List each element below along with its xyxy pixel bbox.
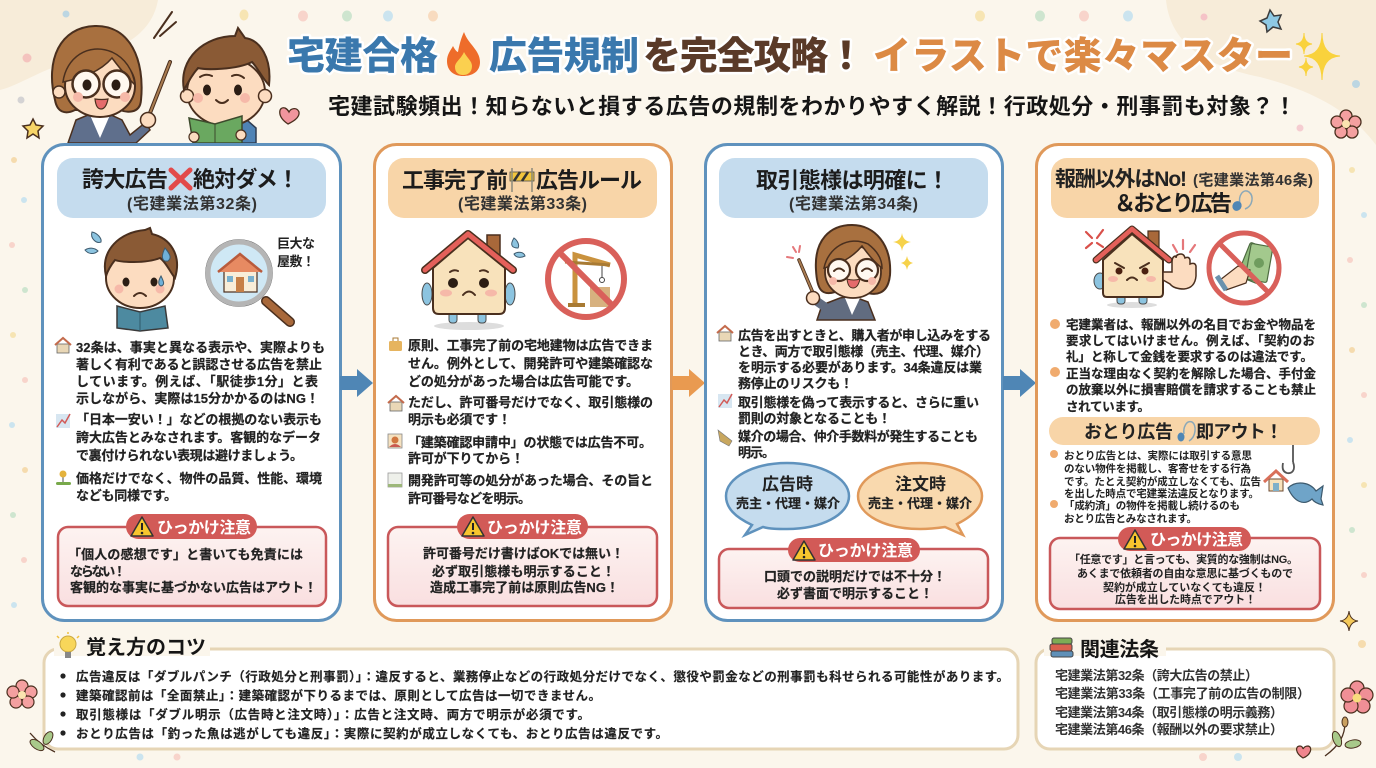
illustration: magnifier over house <box>206 240 290 322</box>
callout: trap warning: 「個人の感想です」と書いても免責には <box>68 547 303 562</box>
text block: forbidden demands: されています。 <box>1066 400 1150 414</box>
callout: trap warning: 口頭での説明だけでは不十分！ <box>764 569 946 584</box>
heading: before completion: (宅建業法第33条) <box>458 194 587 213</box>
callout: trap warning: あくまで依頼者の自由な意思に基づくもので <box>1077 566 1293 580</box>
icon: house <box>55 338 71 353</box>
text block: no-basis claims: 「日本一安い！」などの根拠のない表示も <box>76 412 322 427</box>
illustration: worried boy reading <box>85 228 177 331</box>
callout: huge mansion: 巨大な <box>277 236 315 251</box>
text block: pending application: 「建築確認申請中」の状態では広告不可。 <box>408 435 652 450</box>
text block: forbidden demands: 宅建業者は、報酬以外の名目でお金や物品を <box>1066 317 1316 332</box>
icon: fishing hook <box>1231 191 1252 213</box>
title: 広告規制 <box>489 36 639 78</box>
text block: brokerage fee: 明示。 <box>738 445 775 460</box>
decoration: left flower <box>7 680 37 708</box>
icon: light bulb <box>57 632 79 658</box>
text block: forbidden demands: 要求してはいけません。例えば、「契約のお <box>1066 333 1315 348</box>
list: laws: 宅建業法第32条（誇大広告の禁止） <box>1055 668 1258 683</box>
callout: trap warning: 契約が成立していなくても違反！ <box>1103 580 1266 594</box>
heading: exaggerated ads: (宅建業法第32条) <box>127 194 257 213</box>
callout: trap warning: 造成工事完了前は原則広告NG！ <box>430 580 619 595</box>
list: tips: 広告違反は「ダブルパンチ（行政処分と刑事罰）」：違反すると、業務停止などの行政処分だけでなく、懲役や罰金などの刑事罰も科せられる可能性があります。 <box>76 669 1009 684</box>
decoration: star <box>23 119 43 138</box>
text block: bait definition: です。たとえ契約が成立しなくても、広告 <box>1064 475 1261 488</box>
icon: briefcase <box>389 338 402 351</box>
callout: at order <box>858 463 982 535</box>
heading: no fees beyond commission: (宅建業法第46条) <box>1193 171 1313 189</box>
text block: bait definition <box>1050 449 1261 525</box>
text block: no-basis claims: で裏付けられない表現は避けましょう。 <box>76 448 303 463</box>
illustration: teacher with pointer <box>787 225 913 320</box>
text block: forbidden demands: の放棄以外に損害賠償を請求することも禁止 <box>1066 382 1316 397</box>
arrow: panel 2 to 3 <box>672 369 705 397</box>
heading: clear transaction type <box>719 158 988 218</box>
decoration: blue star <box>1260 10 1281 32</box>
panel: memory tips <box>44 632 1018 749</box>
callout: trap warning <box>388 514 657 606</box>
callout: trap warning <box>719 538 988 608</box>
panel: article 34 <box>706 144 1002 620</box>
list: laws <box>1055 668 1310 737</box>
heading: before completion: 工事完了前 <box>402 168 508 193</box>
text block: rule explanation: 著しく有利であると誤認させる広告を禁止 <box>76 357 322 372</box>
icon: fishing hook <box>1178 422 1195 442</box>
decoration: right star <box>1340 611 1358 631</box>
callout: at advertising: 広告時 <box>762 475 813 494</box>
decoration: left sprig <box>28 730 55 753</box>
heading: no fees beyond commission: ＆おとり広告 <box>1114 191 1232 216</box>
text block: also disclose: ただし、許可番号だけでなく、取引態様の <box>408 395 653 410</box>
heading: clear transaction type: (宅建業法第34条) <box>789 194 918 213</box>
callout: trap warning: 必ず書面で明示すること！ <box>777 586 933 601</box>
illustration: teacher and student <box>52 12 272 143</box>
callout: trap warning: 広告を出した時点でアウト！ <box>1115 592 1256 606</box>
heading: exaggerated ads <box>57 158 326 218</box>
callout: trap warning <box>58 514 326 606</box>
text block: false claims <box>738 395 979 426</box>
heading: bait advertising <box>1049 417 1320 445</box>
text block: forbidden demands: 正当な理由なく契約を解除した場合、手付金 <box>1066 366 1316 381</box>
callout: at advertising <box>726 463 849 535</box>
text block: quality too <box>76 471 322 503</box>
text block: false claims: 罰則の対象となることも！ <box>738 411 891 426</box>
text block: false claims: 取引態様を偽って表示すると、さらに重い <box>738 395 979 410</box>
list: tips: 取引態様は「ダブル明示（広告時と注文時）」：広告と注文時、両方で明示が必須です。 <box>76 707 590 722</box>
text block: principle: 原則、工事完了前の宅地建物は広告できま <box>408 338 653 353</box>
callout: trap warning: 必ず取引態様も明示すること！ <box>432 564 615 579</box>
icon: warning triangle <box>1124 530 1146 549</box>
text block: disclose on both occasions: とき、両方で取引態様（売主、代理、媒介） <box>738 344 989 359</box>
text block: also disclose <box>408 395 653 427</box>
heading: no fees beyond commission <box>1051 158 1319 218</box>
callout: at advertising: 売主・代理・媒介 <box>736 496 840 511</box>
arrow: panel 1 to 2 <box>340 369 373 397</box>
text block: quality too: 価格だけでなく、物件の品質、性能、環境 <box>76 471 322 486</box>
icon: barricade <box>510 168 534 192</box>
decoration: bottom heart <box>1297 746 1311 758</box>
illustration: hook, house and fish <box>1264 445 1323 505</box>
heading: exaggerated ads: 絶対ダメ！ <box>193 167 299 192</box>
icon: flame <box>447 32 480 76</box>
list: tips <box>60 669 1009 741</box>
illustration: angry house <box>1086 229 1196 308</box>
text block: bait definition: 「成約済」の物件を掲載し続けるのも <box>1064 499 1240 512</box>
text block: disclose on both occasions: を明示する必要があります。34条違反は業 <box>738 360 982 375</box>
panel: article 32 <box>42 144 340 620</box>
icon: no construction <box>548 241 624 317</box>
panel: related laws <box>1036 637 1334 749</box>
icon: warning triangle <box>793 541 815 560</box>
text block: also disclose: 明示も必須です！ <box>408 412 511 427</box>
list: laws: 宅建業法第33条（工事完了前の広告の制限） <box>1055 686 1310 701</box>
icon: applicant <box>388 434 402 448</box>
icon: sprout <box>56 470 71 485</box>
list: laws: 宅建業法第34条（取引態様の明示義務） <box>1055 705 1283 720</box>
icon: books <box>1050 638 1073 657</box>
heading: before completion: 広告ルール <box>536 168 642 193</box>
text block: bait definition: のない物件を掲載し、客寄せをする行為 <box>1064 462 1251 475</box>
list: tips: おとり広告は「釣った魚は逃がしても違反」：実際に契約が成立しなくても、おとり広告は違反です。 <box>76 726 668 741</box>
text block: quality too: なども同様です。 <box>76 488 177 503</box>
text block: disclose on both occasions: 務停止のリスクも！ <box>738 376 853 391</box>
callout: trap warning: ならない！ <box>70 564 126 579</box>
decoration: right sprig <box>1325 717 1362 756</box>
decoration: right flower <box>1341 681 1373 713</box>
heading: memory tips: 覚え方のコツ <box>86 636 206 659</box>
subtitle: 宅建試験頻出！知らないと損する広告の規制をわかりやすく解説！行政処分・刑事罰も対象？！ <box>328 94 1296 119</box>
text block: state the permit number <box>408 473 653 506</box>
illustration: sad house <box>422 234 525 330</box>
panel: article 33 <box>374 144 672 620</box>
callout: at order: 注文時 <box>895 475 946 494</box>
heading: clear transaction type: 取引態様は明確に！ <box>756 168 949 193</box>
callout: trap warning: ひっかけ注意 <box>487 519 582 537</box>
callout: huge mansion: 屋敷！ <box>277 254 315 269</box>
icon: red cross <box>171 170 190 188</box>
text block: forbidden demands <box>1050 317 1316 414</box>
text block: pending application <box>408 435 652 466</box>
callout: trap warning: 客観的な事実に基づかない広告はアウト！ <box>70 580 317 595</box>
callout: trap warning: 「任意です」と言っても、実質的な強制はNG。 <box>1069 552 1298 566</box>
title: 宅建合格 <box>287 36 438 78</box>
heading: exaggerated ads: 誇大広告 <box>82 167 168 192</box>
icon: sparkles <box>1296 33 1340 80</box>
list: laws: 宅建業法第46条（報酬以外の要求禁止） <box>1055 722 1283 737</box>
text block: rule explanation <box>76 340 325 406</box>
arrow: panel 3 to 4 <box>1003 369 1036 397</box>
text block: brokerage fee <box>738 429 978 460</box>
icon: chart <box>718 394 732 408</box>
decoration: flower top right <box>1331 110 1361 138</box>
icon: pen <box>718 430 732 446</box>
heading: no fees beyond commission: 報酬以外はNo! <box>1055 168 1187 191</box>
text block: principle: どの処分があった場合は広告可能です。 <box>408 374 639 389</box>
callout: trap warning <box>1050 527 1320 609</box>
text block: principle <box>408 338 653 389</box>
title <box>287 32 1340 80</box>
callout: trap warning: ひっかけ注意 <box>157 519 251 537</box>
heading: bait advertising: 即アウト！ <box>1196 422 1283 442</box>
icon: warning triangle <box>462 517 484 536</box>
title: イラストで楽々マスター <box>873 36 1293 78</box>
text block: principle: せん。例外として、開発許可や建築確認な <box>408 356 653 371</box>
callout: trap warning: ひっかけ注意 <box>818 542 913 560</box>
callout: trap warning: ひっかけ注意 <box>1150 531 1243 549</box>
callout: trap warning: 許可番号だけ書けばOKでは無い！ <box>423 546 624 561</box>
decoration: heart <box>280 108 299 124</box>
heading: related laws: 関連法条 <box>1080 637 1159 661</box>
text block: pending application: 許可が下りてから！ <box>408 451 524 466</box>
icon: document <box>388 473 402 487</box>
text block: rule explanation: しています。例えば、「駅徒歩1分」と表 <box>76 374 318 389</box>
text block: bait definition: を出した時点で宅建業法違反となります。 <box>1064 487 1259 500</box>
text block: no-basis claims: 誇大広告とみなされます。客観的なデータ <box>76 430 321 445</box>
text block: no-basis claims <box>76 412 322 463</box>
text block: bait definition: おとり広告とは、実際には取引する意思 <box>1064 449 1252 462</box>
text block: state the permit number: 許可番号などを明示。 <box>408 491 531 506</box>
icon: warning triangle <box>131 517 153 536</box>
text block: forbidden demands: 礼」と称して金銭を要求するのは違法です。 <box>1066 349 1313 364</box>
heading: before completion <box>388 158 657 218</box>
text block: disclose on both occasions <box>738 328 991 391</box>
callout: at order: 売主・代理・媒介 <box>868 496 972 511</box>
text block: rule explanation: 32条は、事実と異なる表示や、実際よりも <box>76 340 325 355</box>
callout: huge mansion <box>277 236 315 269</box>
icon: no money <box>1209 233 1279 303</box>
text block: rule explanation: 示しながら、実際は15分かかるのはNG！ <box>76 391 319 406</box>
icon: chart <box>56 414 70 428</box>
heading: bait advertising: おとり広告 <box>1084 422 1173 442</box>
text block: brokerage fee: 媒介の場合、仲介手数料が発生することも <box>738 429 978 444</box>
icon: house <box>717 326 733 341</box>
text block: disclose on both occasions: 広告を出すときと、購入者が申し込みをする <box>738 328 991 343</box>
icon: house <box>388 396 404 411</box>
text block: state the permit number: 開発許可等の処分があった場合、その旨と <box>408 473 653 488</box>
text block: bait definition: おとり広告とみなされます。 <box>1064 512 1197 525</box>
panel: article 46 <box>1036 144 1334 620</box>
list: tips: 建築確認前は「全面禁止」：建築確認が下りるまでは、原則として広告は一切できません。 <box>76 688 601 703</box>
title: を完全攻略！ <box>643 36 865 78</box>
